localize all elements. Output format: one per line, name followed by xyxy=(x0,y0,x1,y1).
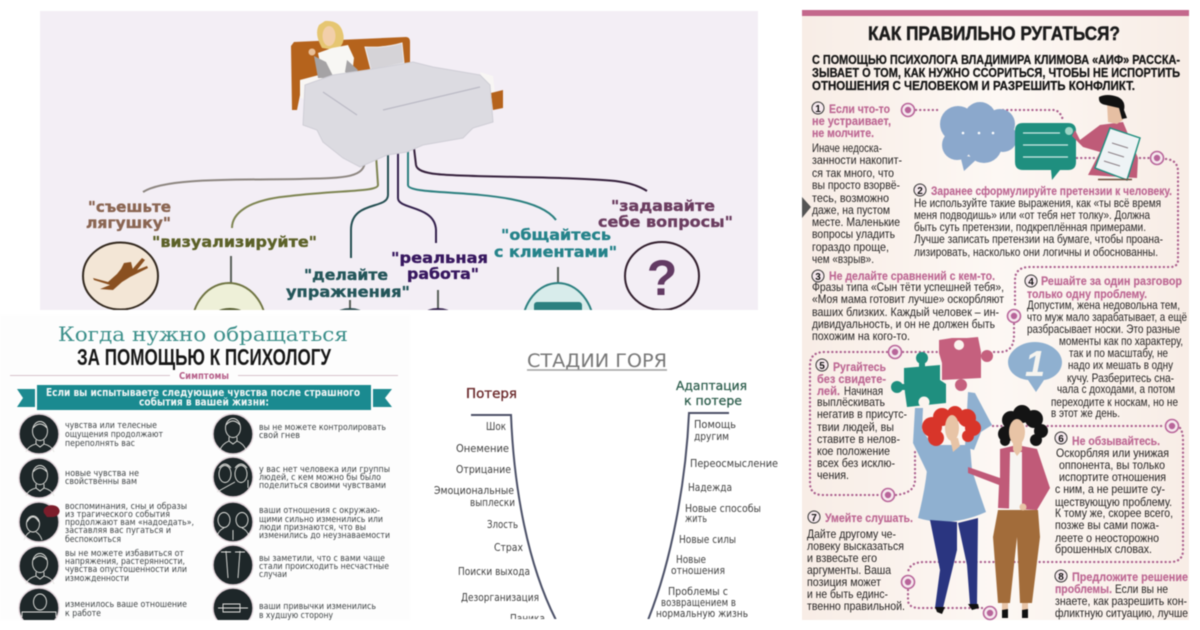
ribbon banner xyxy=(17,385,392,410)
adaptation stages: возвращением в xyxy=(661,597,736,609)
section 5: Ругайтесь xyxy=(833,360,886,374)
label: ask yourself questions: себе вопросы" xyxy=(598,213,733,231)
section 5 xyxy=(816,359,907,482)
section 1: вы просто взорвё- xyxy=(812,178,900,192)
section 6: брошенных словах. xyxy=(1055,542,1152,556)
icon: dark teal circle xyxy=(340,307,360,311)
section 1: Иначе недоска- xyxy=(812,141,882,155)
adaptation stages: нормальную жизнь xyxy=(656,608,748,620)
label: talk to clients xyxy=(494,227,617,258)
loss stages: Поиски выхода xyxy=(458,566,530,578)
icon: blue bubble with one xyxy=(1008,342,1062,392)
symptoms right column: в худшую сторону xyxy=(259,611,333,621)
top bar xyxy=(802,10,1189,16)
label: eat the frog: "съешьте xyxy=(88,198,171,216)
symptoms right column: людей, с кем можно бы было xyxy=(259,473,381,483)
section 1: занности накопит- xyxy=(812,153,902,167)
section 2: меня подводишь» или «от тебя нет толку». Должна xyxy=(914,208,1150,222)
symptoms left column: чувства или телесные xyxy=(65,421,157,431)
loss stages: Отрицание xyxy=(456,464,511,476)
icon: blue cloud bubble xyxy=(940,102,1017,171)
symptoms left column: переполнять вас xyxy=(65,439,135,449)
loss stages: Дезорганизация xyxy=(461,592,539,604)
label: eat the frog: лягушку" xyxy=(86,214,171,232)
icon: question circle xyxy=(625,242,699,310)
symptoms left column: вы не можете избавиться от xyxy=(65,549,184,559)
section 3: Фразы типа «Сын тёти успешней тебя», xyxy=(812,280,1004,294)
symptoms right column: ваши отношения с окружаю- xyxy=(259,506,380,516)
section 5: кое положение xyxy=(817,444,890,458)
section 4: кучу. Разберитесь сна- xyxy=(1067,371,1174,385)
symptoms right column: случаи xyxy=(259,570,287,580)
icon: olive circle centre xyxy=(219,307,241,311)
illustration: woman in bed xyxy=(291,21,503,167)
section 7: Умейте слушать. xyxy=(825,511,913,525)
symptoms right column: у вас нет человека или группы xyxy=(259,465,390,475)
symptoms right column: ваши привычки изменились xyxy=(259,602,376,612)
symptoms right column: свой гнев xyxy=(259,431,300,441)
symptoms left column: свойственны вам xyxy=(65,477,137,487)
label: ask yourself questions: "задавайте xyxy=(611,197,715,215)
curve: loss xyxy=(471,415,556,620)
icon: monkey circle xyxy=(83,242,158,310)
adaptation stages: Проблемы с xyxy=(668,586,728,598)
icons: symptom circles xyxy=(19,414,253,628)
symptoms right column xyxy=(259,423,390,621)
section 5: выплёскивать xyxy=(817,395,885,409)
section 6: Оскорбляя или унижая xyxy=(1056,446,1169,460)
section 4: переходите к носкам, но не xyxy=(1051,395,1178,409)
section 1: месте. Маленькие xyxy=(812,215,900,229)
section 5: чения. xyxy=(817,468,849,482)
tree branches xyxy=(143,148,647,310)
section 4: так и по масштабу, не xyxy=(1069,346,1168,360)
section 7: аргументы. Ваша xyxy=(807,563,891,577)
loss stages xyxy=(434,421,545,625)
panel: when to see a psychologist xyxy=(10,325,398,621)
section 1: 1 xyxy=(815,104,821,115)
icon: purple circle xyxy=(428,307,448,311)
label: talk to clients: "общайтесь xyxy=(501,226,611,244)
symptoms divider: Симптомы xyxy=(179,371,229,382)
label: do exercises xyxy=(286,266,410,301)
title black: ЗА ПОМОЩЬЮ К ПСИХОЛОГУ xyxy=(77,344,332,370)
illustration: woman with red hair xyxy=(913,392,992,614)
symptoms left column: ощущения продолжают xyxy=(65,430,163,440)
symptoms left column: новые чувства не xyxy=(65,469,139,479)
heading: loss: Потеря xyxy=(466,387,517,402)
side marker xyxy=(802,197,811,218)
icon: red thought bubble xyxy=(44,505,60,517)
heading: adaptation: Адаптация xyxy=(676,378,747,393)
section 1: Если что-то xyxy=(829,102,890,116)
section 5: Начиная xyxy=(844,384,883,398)
adaptation stages: Надежда xyxy=(688,482,732,494)
section 3: дивидуальность, и он не должен быть xyxy=(812,317,995,331)
section 1: тесь, возможно xyxy=(812,191,889,205)
section 6: испортите отношения xyxy=(1059,470,1166,484)
symptoms right column: щими сильно изменились или xyxy=(259,515,383,525)
section 2 xyxy=(914,184,1172,259)
adaptation stages: жить xyxy=(685,513,707,525)
section 3 xyxy=(812,269,1004,343)
panel: stages of grief xyxy=(434,350,778,625)
icon: question circle: ? xyxy=(647,250,677,306)
section 6 xyxy=(1055,432,1173,556)
title teal: Когда нужно обращаться xyxy=(58,322,348,346)
adaptation stages: Новые xyxy=(676,554,706,566)
symptoms left column: беспокоиться xyxy=(65,535,121,545)
symptoms left column xyxy=(65,421,194,619)
section 6: с ним, а не решите су- xyxy=(1055,482,1165,496)
section 1: ся так много, что xyxy=(812,166,894,180)
loss stages: выплески xyxy=(470,497,515,509)
section 7: и не быть единс- xyxy=(807,587,888,601)
panel: how to argue correctly xyxy=(802,10,1189,620)
section 6: 6 xyxy=(1058,434,1064,445)
section 7: ловеку высказаться xyxy=(807,539,904,553)
symptoms right column: стали происходить несчастные xyxy=(259,562,389,572)
section 5: лей. xyxy=(817,384,840,398)
label: real work: работа" xyxy=(407,265,479,283)
symptoms right column: вы заметили, что с вами чаще xyxy=(259,554,385,564)
symptoms left column: заставляя вас пугаться и xyxy=(65,526,171,536)
title: КАК ПРАВИЛЬНО РУГАТЬСЯ? xyxy=(868,24,1120,45)
symptoms left column: из трагического события xyxy=(65,510,170,520)
section 2: быть суть претензии, подкреплённая примерами. xyxy=(914,220,1146,234)
label: ask yourself questions xyxy=(598,197,733,231)
section 7: и взвесьте его xyxy=(807,551,877,565)
symptoms left column: напряжения, растерянности, xyxy=(65,557,185,567)
section 4: надо их мешать в одну xyxy=(1068,358,1173,372)
symptoms left column: воспоминания, сны и образы xyxy=(65,502,187,512)
section 1: чем «взрыв». xyxy=(812,252,874,266)
adaptation stages: другим xyxy=(694,431,729,443)
section 8 xyxy=(1055,570,1188,620)
symptoms right column: вы не можете контролировать xyxy=(259,423,386,433)
label: talk to clients: с клиентами" xyxy=(494,243,617,261)
symptoms left column: к работе xyxy=(65,609,101,619)
symptoms right column: изменились до неузнаваемости xyxy=(259,531,390,541)
symptoms right column: поделиться своими чувствами xyxy=(259,481,386,491)
label: do exercises: упражнения" xyxy=(286,283,410,301)
ribbon banner: события в вашей жизни: xyxy=(139,396,269,408)
loss stages: Шок xyxy=(486,421,506,433)
section 3: похожим на кого-то. xyxy=(812,329,910,343)
illustration: woman with clipboard xyxy=(1065,95,1140,180)
symptoms left column: продолжают вам «надоедать», xyxy=(65,518,194,528)
label: real work xyxy=(391,249,488,283)
heading: adaptation xyxy=(676,378,747,408)
icon: teal bubble xyxy=(1015,123,1076,180)
icons: symptom figures xyxy=(22,418,249,617)
loss stages: Злость xyxy=(487,519,518,531)
section 5: негатив в присутс- xyxy=(817,407,907,421)
panel: bed and advice tree xyxy=(40,11,758,311)
section 3: «Моя мама готовит лучше» оскорбляют xyxy=(812,292,1004,306)
icon: blue bubble with one: 1 xyxy=(1025,343,1045,384)
section 5: ставите в нелов- xyxy=(817,432,900,446)
section 7: позиция может xyxy=(807,575,881,589)
label: real work: "реальная xyxy=(391,249,488,267)
section 4: в этот же день. xyxy=(1051,406,1120,420)
section 1: гораздо проще, xyxy=(812,240,889,254)
section 8: 8 xyxy=(1058,572,1064,583)
dotted connector xyxy=(810,110,1183,608)
section 5: без свидете- xyxy=(817,372,886,386)
heading: adaptation: к потере xyxy=(684,393,742,408)
adaptation stages: Новые силы xyxy=(679,534,736,546)
section 7: Дайте другому че- xyxy=(807,527,896,541)
illustration: woman with dark hair xyxy=(968,405,1050,618)
adaptation stages: Новые способы xyxy=(685,503,761,515)
illustration: puzzle pieces xyxy=(891,337,993,408)
intro: ОТНОШЕНИЯ С ЧЕЛОВЕКОМ И РАЗРЕШИТЬ КОНФЛИКТ. xyxy=(812,78,1135,93)
section 8: проблемы. xyxy=(1055,582,1112,596)
icon: olive circle xyxy=(193,281,265,311)
adaptation stages: Помощь xyxy=(694,419,736,431)
section 7: твенно правильной. xyxy=(807,599,905,613)
intro xyxy=(812,52,1180,93)
section 8: Предложите решение xyxy=(1072,570,1188,584)
section 6: К тому же, скорее всего, xyxy=(1055,506,1173,520)
curve: adaptation xyxy=(648,413,729,620)
section 7: 7 xyxy=(811,513,817,524)
symptoms right column: люди признаются, что вы xyxy=(259,523,366,533)
section 7 xyxy=(807,511,913,613)
icon: teal client circle xyxy=(523,281,593,311)
section 1: вопросы уладить xyxy=(812,227,895,241)
loss stages: Эмоциональные xyxy=(434,485,514,497)
label: visualize: "визуализируйте" xyxy=(152,233,317,251)
section 1: не молчите. xyxy=(812,126,874,140)
section 5: 5 xyxy=(819,361,825,372)
label: eat the frog xyxy=(86,198,171,232)
symptoms left column: изможденности xyxy=(65,574,129,584)
section 5: твии людей, вы xyxy=(817,420,894,434)
ribbon banner: Если вы испытываете следующие чувства после страшного xyxy=(46,387,360,399)
target markers xyxy=(882,104,1178,620)
section 3: 3 xyxy=(815,272,821,283)
section 3: ваших близких. Каждый человек – ин- xyxy=(812,305,999,319)
section 1: не устраивает, xyxy=(812,114,891,128)
section 1: даже, на пустом xyxy=(812,203,890,217)
section 5: всех без исклю- xyxy=(817,456,895,470)
section 4: 4 xyxy=(1028,277,1034,288)
section 6: Не обзывайтесь. xyxy=(1072,434,1160,448)
grief title: СТАДИИ ГОРЯ xyxy=(527,350,667,372)
loss stages: Страх xyxy=(494,542,523,554)
symptoms left column: изменилось ваше отношение xyxy=(65,600,187,610)
section 4: Решайте за один разговор xyxy=(1041,274,1182,288)
section 4 xyxy=(1025,274,1187,420)
adaptation stages: отношения xyxy=(671,565,725,577)
section 2: лизировать, насколько они логичны и обоснованны. xyxy=(914,245,1158,259)
loss stages: Онемение xyxy=(456,443,509,455)
loss stages: Паника xyxy=(510,613,545,625)
section 1 xyxy=(812,102,902,266)
section 6: ществующую проблему. xyxy=(1055,495,1172,509)
section 8: Если вы не xyxy=(1115,582,1168,596)
section 6: леете о неосторожно xyxy=(1055,531,1159,545)
section 4: только одну проблему. xyxy=(1027,287,1147,301)
section 4: чала с доходами, а потом xyxy=(1057,382,1175,396)
adaptation stages: Переосмысление xyxy=(690,458,778,470)
label: do exercises: "делайте xyxy=(304,266,388,284)
target centres xyxy=(885,107,1175,616)
section 3: Не делайте сравнений с кем-то. xyxy=(829,269,995,283)
section 6: оппонента, вы только xyxy=(1059,458,1165,472)
section 6: позже вы сами пожа- xyxy=(1055,518,1159,532)
section 2: 2 xyxy=(917,186,923,197)
adaptation stages xyxy=(656,419,778,620)
symptoms left column: чувства опустошенности или xyxy=(65,565,187,575)
